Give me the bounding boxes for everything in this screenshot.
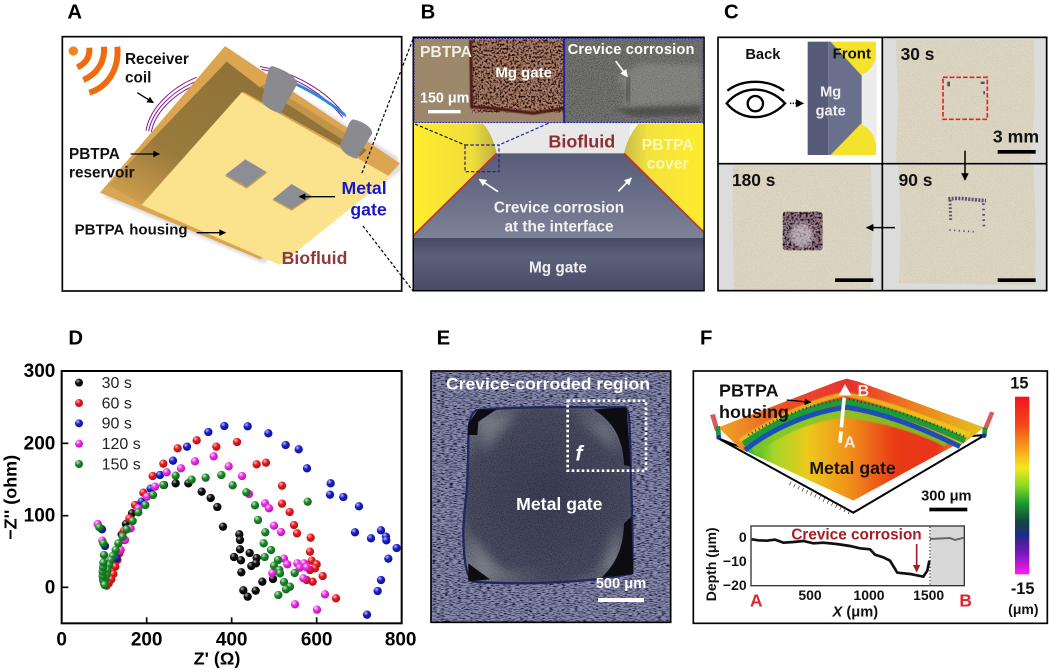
biofluid gap <box>857 57 877 140</box>
white arrows <box>479 178 631 192</box>
x title: X (μm) <box>832 605 878 621</box>
SEM arrow <box>616 61 627 77</box>
panel E frame <box>431 371 671 622</box>
labels A and B: A <box>844 434 856 451</box>
labels A and B <box>844 383 869 451</box>
y ticks: 0 <box>739 529 747 545</box>
profile trace in housing zone <box>930 538 964 540</box>
dark crevice corners <box>467 407 633 582</box>
scale bar <box>598 598 644 602</box>
labels: Mg <box>820 84 841 100</box>
color bar labels <box>1008 375 1038 617</box>
view arrow <box>790 101 803 106</box>
label: crevice-corroded region: Crevice-corroded region <box>446 375 650 393</box>
legend: 120 s <box>102 436 141 453</box>
red arrow <box>913 544 920 573</box>
label: biofluid: Biofluid <box>282 248 347 268</box>
label: receiver coil <box>125 51 189 87</box>
arrow to housing <box>787 400 811 402</box>
scale label: 500 μm <box>596 576 646 592</box>
x axis numbers: 400 <box>216 630 248 651</box>
label: metal gate: Metal gate <box>809 458 896 478</box>
panel A: device schematic <box>62 2 402 291</box>
crevice corrosion label: Crevice corrosion <box>791 526 922 543</box>
panel E: corroded gate micrograph <box>431 328 671 622</box>
receiver coil wires <box>146 67 346 132</box>
color bar <box>1015 397 1029 574</box>
label: crevice corrosion at the interface: Crevice corrosion <box>494 199 624 216</box>
yellow ridge glow <box>740 394 970 441</box>
yellow covers <box>831 42 876 155</box>
label: PBTPA housing: housing <box>719 402 789 422</box>
PBTPA reservoir body <box>100 46 400 259</box>
label: PBTPA housing: PBTPA <box>719 381 779 401</box>
Mg gate trapezoid <box>414 153 703 238</box>
PBTPA housing sheet <box>142 92 390 265</box>
arrow to gate <box>299 195 335 199</box>
housing surface <box>718 379 984 452</box>
arrow to housing <box>197 231 225 235</box>
y axis numbers: 100 <box>24 506 55 527</box>
metal gate openings <box>225 159 313 211</box>
label: PBTPA cover: PBTPA <box>642 137 694 154</box>
heading C: C <box>724 2 739 24</box>
device shadow <box>103 50 402 263</box>
series: 90 s <box>98 422 401 619</box>
right PBTPA cover <box>624 124 703 232</box>
corner posts <box>710 412 994 440</box>
eye icon <box>727 82 785 117</box>
labels: gate <box>816 103 846 119</box>
label: Mg gate: Mg gate <box>529 260 587 277</box>
base plate <box>718 417 985 513</box>
label: PBTPA reservoir: reservoir <box>69 165 135 182</box>
inset labels: 150 μm <box>420 91 469 107</box>
label: f: f <box>575 442 584 466</box>
arrow: 90 s to 180 s <box>867 225 895 230</box>
series: 120 s <box>93 452 329 614</box>
labels: Back <box>745 47 781 63</box>
3D surface <box>710 379 994 513</box>
x axis title: Z' (Ω) <box>194 649 240 669</box>
red dashed gate outline <box>943 77 987 119</box>
icon: wireless signal <box>69 46 118 93</box>
panel B: crevice cross-section <box>413 2 704 291</box>
y axis numbers: 0 <box>45 578 55 599</box>
label: crevice corrosion at the interface: at the interface <box>504 218 614 235</box>
x axis numbers: 200 <box>131 630 163 651</box>
inset labels: PBTPA <box>420 44 472 61</box>
panel F: 3D profilometry <box>693 328 1047 623</box>
label: PBTPA cover <box>642 137 694 173</box>
inset labels <box>420 42 695 107</box>
scale label: 300 μm <box>921 489 972 505</box>
inset borders <box>414 38 703 123</box>
label: PBTPA reservoir: PBTPA <box>69 146 120 163</box>
debris <box>790 483 850 513</box>
gray clamps <box>262 66 372 159</box>
corrosion specks <box>947 82 985 94</box>
chart frame <box>751 526 964 586</box>
label: PBTPA housing: PBTPA housing <box>75 221 188 238</box>
legend: 90 s <box>102 416 132 433</box>
scale label: 3 mm <box>993 126 1039 146</box>
gate outline <box>463 407 633 583</box>
noisy ridge <box>748 399 967 437</box>
label: receiver coil: Receiver <box>125 51 189 68</box>
y axis numbers: 300 <box>24 361 55 382</box>
inset labels: Mg gate <box>495 64 552 81</box>
y ticks: −20 <box>723 577 747 593</box>
speckled substrate <box>431 371 671 622</box>
zoom box and guide lines <box>415 123 548 172</box>
heading A: A <box>67 2 82 24</box>
x ticks: 1000 <box>853 587 885 603</box>
photo: 30 s <box>883 37 1047 163</box>
reservoir cavity <box>108 62 367 204</box>
color bar labels: (μm) <box>1008 601 1038 617</box>
profile trace <box>752 539 929 577</box>
arrow: 30 s to 90 s <box>963 151 967 180</box>
y ticks: −10 <box>723 553 747 569</box>
scale bar <box>835 278 873 282</box>
inset scale bar <box>428 110 461 113</box>
x axis numbers: 600 <box>301 630 333 651</box>
color bar labels: -15 <box>1011 580 1034 598</box>
corroded square <box>783 212 823 250</box>
gate region <box>463 407 633 583</box>
legend <box>75 375 141 473</box>
panel C: time-lapse corrosion <box>718 2 1047 291</box>
legend: 30 s <box>102 375 132 392</box>
color bar labels: 15 <box>1010 375 1028 393</box>
schematic cell <box>718 37 882 163</box>
labels A and B: B <box>858 383 869 400</box>
legend: 60 s <box>102 395 132 412</box>
label: metal gate: gate <box>350 199 387 219</box>
legend: 150 s <box>102 456 141 473</box>
time label: 30 s <box>901 44 934 64</box>
series: 30 s <box>117 479 277 601</box>
x ticks <box>798 587 944 603</box>
white section line A-B <box>839 384 851 443</box>
corrosion interface lines <box>414 153 703 235</box>
label: receiver coil: coil <box>125 70 151 87</box>
heading F: F <box>700 328 712 350</box>
panel B frame <box>413 37 704 291</box>
y axis title: −Z'' (ohm) <box>1 455 21 540</box>
labels: Front <box>833 46 871 63</box>
x axis numbers: 800 <box>385 630 417 651</box>
SEM micrograph <box>565 38 703 123</box>
scale bar <box>929 508 967 511</box>
corrosion dots <box>948 198 986 232</box>
boundary line <box>928 527 932 585</box>
label: PBTPA reservoir <box>69 146 135 182</box>
label: crevice corrosion at the interface <box>494 199 624 235</box>
arrow to coil <box>137 93 153 103</box>
panel F frame <box>693 371 1047 623</box>
plot frame <box>62 371 402 623</box>
label: biofluid: Biofluid <box>548 131 615 151</box>
x ticks: 1500 <box>913 587 944 603</box>
heading B: B <box>421 2 435 24</box>
y title: Depth (μm) <box>703 527 719 601</box>
A and B markers: B <box>959 591 972 611</box>
green upper transition <box>743 401 965 444</box>
biofluid background <box>483 124 630 153</box>
photo: 180 s <box>718 164 882 290</box>
blue crevice band <box>745 407 960 450</box>
label: metal gate: Metal gate <box>516 494 603 514</box>
grey housing zone <box>931 527 964 585</box>
x ticks: 500 <box>798 587 822 603</box>
series: 60 s <box>102 436 340 602</box>
heading E: E <box>437 328 450 350</box>
depth chart <box>703 526 972 621</box>
A and B markers: A <box>750 591 763 611</box>
x axis numbers: 0 <box>56 630 67 651</box>
x axis numbers <box>56 630 417 651</box>
micrograph: PBTPA and Mg gate <box>414 38 564 123</box>
inset labels: Crevice corrosion <box>568 42 695 58</box>
panel D: Nyquist plot <box>1 328 417 669</box>
Mg gate base <box>414 238 703 290</box>
y ticks <box>723 529 747 593</box>
left PBTPA cover <box>414 124 497 235</box>
gate back face <box>808 42 828 155</box>
arrow to reservoir <box>131 152 159 156</box>
label: PBTPA housing <box>719 381 789 422</box>
label: metal gate: Metal <box>342 178 387 198</box>
gate front face <box>828 42 862 155</box>
zoom connector lines <box>362 39 413 291</box>
panel C grid <box>718 37 1047 291</box>
reservoir inner ledge <box>262 83 348 139</box>
series: 150 s <box>95 471 312 599</box>
time label: 180 s <box>732 170 775 190</box>
labels <box>745 46 871 119</box>
y axis numbers: 200 <box>24 433 55 454</box>
dotted f box <box>568 401 646 471</box>
scale bar <box>998 278 1036 282</box>
heading D: D <box>68 328 83 350</box>
A and B markers <box>750 591 972 611</box>
panel A frame <box>62 37 402 291</box>
label: metal gate <box>342 178 387 219</box>
time label: 90 s <box>899 170 932 190</box>
y axis numbers <box>24 361 55 599</box>
lighter gate edge zones <box>470 415 620 577</box>
label: PBTPA cover: cover <box>647 156 689 173</box>
photo: 90 s <box>883 164 1047 290</box>
scale bar <box>998 150 1036 154</box>
green lower transition <box>753 414 947 451</box>
metal gate surface <box>745 407 953 501</box>
